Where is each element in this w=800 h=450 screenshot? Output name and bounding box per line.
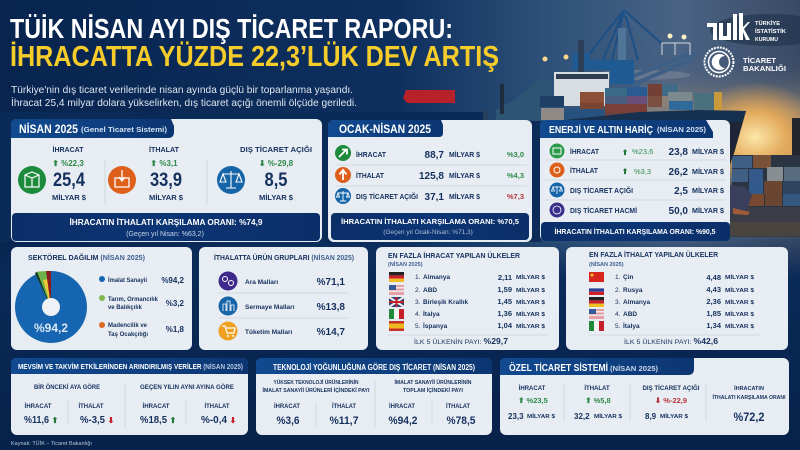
logo: Ticaret Bakanlığı: BAKANLIĞI (743, 64, 786, 73)
coverage ratio bar (541, 222, 730, 241)
row: ihracat: İHRACAT (356, 151, 387, 159)
metric: ihracat: ⬆ %22,3 (52, 159, 84, 168)
group: geçen yılın aynı ayına göre: %18,5 (140, 415, 167, 426)
logo: TÜİK: İSTATİSTİK (755, 28, 786, 35)
panel: özel ticaret sistemi (500, 358, 789, 435)
panel: en fazla ithalat yapılan ülkeler: (NİSAN 2025) (589, 261, 624, 268)
legend: %3,2 (166, 299, 185, 308)
column: dış ticaret açığı: 8,9 (645, 412, 657, 421)
legend: Taş Ocakçılığı (108, 331, 148, 338)
logo: Ticaret Bakanlığı: TİCARET (743, 56, 776, 65)
row: ithalat: %3,3 (634, 167, 651, 176)
panel: en fazla ithalat yapılan ülkeler: 1,85 (706, 309, 721, 318)
row: ihracat: 23,8 (669, 147, 688, 158)
metric: dış ticaret açığı: 8,5 (264, 170, 288, 191)
group: bir önceki aya göre: İHRACAT (24, 402, 52, 410)
row: dış ticaret hacmi: 50,0 (669, 206, 688, 217)
legend: ve Balıkçılık (108, 304, 142, 311)
group: yüksek teknoloji: İTHALAT (332, 402, 356, 410)
panel: en fazla ihracat yapılan ülkeler (376, 247, 559, 350)
panel header: özel: ÖZEL TİCARET SİSTEMİ (509, 361, 608, 374)
group: bir önceki aya göre: %11,6 (24, 415, 49, 426)
metric: ithalat (149, 146, 183, 202)
legend: Madencilik ve (108, 322, 147, 329)
group: geçen yılın aynı ayına göre: ⬆ (170, 416, 176, 425)
footer share: İLK 5 ÜLKENİN PAYI: %29,7 (414, 337, 509, 346)
group: bir önceki aya göre: ⬆ (52, 416, 58, 425)
row: dış ticaret hacmi: DIŞ TİCARET HACMİ (570, 207, 637, 215)
row: ithalat: 125,8 (419, 171, 444, 182)
panel: en fazla ihracat yapılan ülkeler: MİLYAR $ (516, 287, 546, 294)
column: ihracat: İHRACAT (519, 385, 546, 392)
group: bir önceki aya göre: ⬇ (108, 416, 114, 425)
legend: İmalat Sanayii (108, 276, 147, 284)
row: ara malları (218, 272, 345, 290)
panel: ithalatta ürün grupları: İTHALATTA ÜRÜN GRUPLARI (NİSAN 2025) (214, 253, 354, 262)
panel: Ocak-Nisan 2025 (328, 120, 532, 242)
row: ithalat: İTHALAT (570, 167, 599, 175)
row: ithalat: İTHALAT (356, 172, 385, 180)
intro text: Türkiye'nin dış ticaret verilerinde nisan ayında güçlü bir toparlanma yaşandı. (11, 84, 353, 96)
legend: %1,8 (166, 325, 185, 334)
panel header: teknoloji (256, 358, 492, 374)
panel: ithalatta ürün grupları (199, 247, 368, 350)
title: TÜİK NİSAN AYI DIŞ TİCARET RAPORU: (10, 13, 453, 44)
panel: en fazla ihracat yapılan ülkeler: 1,04 (497, 321, 513, 330)
column: karşılama oranı: İTHALATI KARŞILAMA ORANI (712, 394, 786, 401)
panel: en fazla ithalat yapılan ülkeler: İtalya (623, 322, 640, 330)
panel header: Enerji: ENERJİ VE ALTIN HARİÇ (549, 123, 653, 136)
panel: en fazla ithalat yapılan ülkeler: 4,48 (706, 273, 721, 282)
row: ihracat: MİLYAR $ (449, 151, 480, 159)
row: ithalat: MİLYAR $ (692, 168, 724, 176)
group: geçen yılın aynı ayına göre (140, 382, 236, 426)
row: dış ticaret açığı: %7,3 (507, 192, 524, 201)
row: ihracat: MİLYAR $ (692, 148, 724, 156)
group: imalat sanayii (388, 379, 476, 427)
panel: sektörel dağılım (11, 247, 192, 350)
panel: en fazla ithalat yapılan ülkeler: 3. (615, 299, 621, 306)
panel: en fazla ithalat yapılan ülkeler: 4. (615, 311, 621, 318)
icon: export box (18, 166, 46, 194)
intro text: İhracat 25,4 milyar dolara yükselirken, dış ticaret açığı önemli ölçüde geriledi. (11, 96, 357, 109)
legend: Tarım, Ormancılık (108, 296, 158, 303)
column: ithalat: MİLYAR $ (594, 413, 622, 420)
panel header: Enerji: (NİSAN 2025) (657, 126, 706, 134)
column: ihracat: 23,3 (508, 412, 524, 421)
row: dış ticaret hacmi: MİLYAR $ (692, 207, 724, 215)
panel: en fazla ithalat yapılan ülkeler: Almanya (623, 299, 650, 306)
panel: mevsim ve takvim (11, 358, 248, 435)
logo: TÜİK (707, 13, 786, 43)
panel: en fazla ithalat yapılan ülkeler: 4,43 (706, 285, 721, 294)
panel header: mevsim (11, 358, 248, 374)
column: karşılama oranı: %72,2 (734, 410, 765, 424)
panel header: Nisan 2025: NİSAN 2025 (19, 121, 78, 136)
logo: TÜİK: KURUMU (755, 37, 778, 43)
flag: Russia (589, 285, 604, 295)
panel: en fazla ithalat yapılan ülkeler: 1. (615, 274, 621, 281)
panel header: mevsim: MEVSİM VE TAKVİM ETKİLERİNDEN ARINDIRILMIŞ VERİLER (NİSAN 2025) (18, 363, 243, 371)
group: yüksek teknoloji: İMALAT SANAYİİ ÜRÜNLERİ İÇİNDEKİ PAYI (262, 387, 370, 394)
metric: ithalat: MİLYAR $ (149, 194, 183, 202)
row: ihracat: %3,0 (507, 150, 524, 159)
panel: en fazla ithalat yapılan ülkeler: 2. (615, 287, 621, 294)
icon: scales (217, 166, 245, 194)
column: dış ticaret açığı: MİLYAR $ (660, 413, 688, 420)
panel header: Enerji (540, 120, 713, 138)
panel header: özel: (NİSAN 2025) (610, 365, 658, 373)
pie chart (15, 271, 87, 343)
column: ihracat: ⬆ %23,5 (518, 396, 548, 405)
row: dış ticaret açığı: 2,5 (674, 186, 688, 197)
column: ihracat: MİLYAR $ (527, 413, 555, 420)
panel: en fazla ithalat yapılan ülkeler: Rusya (623, 287, 643, 294)
row: sermaye malları (218, 296, 345, 316)
panel: en fazla ithalat yapılan ülkeler: MİLYAR $ (725, 323, 755, 330)
flag: Italy (389, 309, 404, 319)
flag: Italy (589, 321, 604, 331)
flag: Germany (389, 272, 404, 282)
panel: en fazla ithalat yapılan ülkeler: EN FAZLA İTHALAT YAPILAN ÜLKELER (589, 250, 719, 259)
source note: Kaynak: TÜİK – Ticaret Bakanlığı (11, 440, 92, 447)
ship bow (700, 110, 746, 165)
row: ithalat (335, 167, 524, 183)
panel: en fazla ithalat yapılan ülkeler: 5. (615, 323, 621, 330)
column: karşılama oranı (712, 385, 786, 424)
panel: en fazla ithalat yapılan ülkeler: MİLYAR $ (725, 287, 755, 294)
metric: ihracat (52, 146, 86, 202)
title (10, 13, 499, 73)
panel: en fazla ithalat yapılan ülkeler: Çin (623, 274, 634, 281)
column: dış ticaret açığı: DIŞ TİCARET AÇIĞI (642, 384, 700, 392)
row: dış ticaret açığı: DIŞ TİCARET AÇIĞI (356, 192, 418, 201)
ship superstructure (554, 72, 609, 106)
coverage ratio bar: (Geçen yıl Ocak-Nisan: %71,3) (383, 229, 473, 236)
panel: en fazla ihracat yapılan ülkeler: MİLYAR $ (516, 311, 546, 318)
panel: en fazla ihracat yapılan ülkeler: MİLYAR $ (516, 323, 546, 330)
metric: dış ticaret açığı (240, 145, 312, 202)
panel: en fazla ihracat yapılan ülkeler: 1,59 (497, 285, 512, 294)
group: imalat sanayii: İMALAT SANAYİİ ÜRÜNLERİNİN (394, 379, 472, 386)
column: ithalat (574, 385, 622, 421)
row: ihracat (335, 145, 524, 161)
group: geçen yılın aynı ayına göre: İTHALAT (204, 402, 230, 410)
intro text (11, 84, 357, 109)
panel: en fazla ihracat yapılan ülkeler: 2,11 (498, 273, 512, 282)
coverage ratio bar (331, 213, 529, 240)
flag: USA (389, 285, 404, 295)
group: imalat sanayii: TOPLAM İÇİNDEKİ PAYI (403, 387, 463, 394)
panel: en fazla ithalat yapılan ülkeler: MİLYAR $ (725, 274, 755, 281)
flag: Germany (589, 297, 604, 307)
metric: ihracat: MİLYAR $ (52, 194, 86, 202)
column: ithalat: İTHALAT (584, 385, 610, 392)
panel: en fazla ihracat yapılan ülkeler: 2. (415, 287, 421, 294)
row: dış ticaret açığı: MİLYAR $ (449, 193, 480, 201)
metric: ithalat: İTHALAT (149, 146, 180, 154)
panel: en fazla ihracat yapılan ülkeler: 3. (415, 299, 421, 306)
panel: en fazla ihracat yapılan ülkeler: 4. (415, 311, 421, 318)
group: geçen yılın aynı ayına göre: GEÇEN YILIN AYNI AYINA GÖRE (140, 382, 235, 391)
panel: en fazla ithalat yapılan ülkeler: MİLYAR $ (725, 311, 755, 318)
icon: import box (108, 166, 136, 194)
logo: Ticaret Bakanlığı (704, 48, 786, 76)
group: imalat sanayii: İTHALAT (446, 402, 470, 410)
coverage ratio bar: İHRACATIN İTHALATI KARŞILAMA ORANI: %70,5 (341, 217, 519, 226)
row: ihracat: 88,7 (425, 150, 444, 161)
group: bir önceki aya göre: %-3,5 (80, 415, 105, 426)
panel: en fazla ihracat yapılan ülkeler: 1. (415, 274, 421, 281)
row: dış ticaret açığı: 37,1 (425, 192, 444, 203)
panel header: Nisan 2025: (Genel Ticaret Sistemi) (81, 125, 168, 134)
panel: en fazla ihracat yapılan ülkeler: Almanya (423, 274, 450, 281)
metric: dış ticaret açığı: MİLYAR $ (259, 194, 293, 202)
column: dış ticaret açığı (642, 384, 700, 421)
panel: Enerji ve altın hariç (540, 120, 730, 241)
coverage ratio bar: İHRACATIN İTHALATI KARŞILAMA ORANI: %90,5 (554, 227, 716, 236)
panel: en fazla ithalat yapılan ülkeler (566, 247, 788, 350)
panel: en fazla ithalat yapılan ülkeler: MİLYAR $ (725, 299, 755, 306)
container stacks (496, 79, 552, 120)
group: geçen yılın aynı ayına göre: %-0,4 (201, 415, 227, 426)
panel: en fazla ithalat yapılan ülkeler: 1,34 (706, 321, 722, 330)
panel: en fazla ihracat yapılan ülkeler: İtalya (423, 310, 440, 318)
group: yüksek teknoloji: İHRACAT (274, 402, 300, 410)
flag: China (589, 272, 604, 282)
row: dış ticaret hacmi (550, 202, 724, 218)
group: imalat sanayii: İHRACAT (389, 402, 415, 410)
metric: ithalat: ⬆ %3,1 (150, 159, 178, 168)
row: tüketim malları: Tüketim Malları (245, 329, 293, 336)
panel header: teknoloji: TEKNOLOJİ YOĞUNLUĞUNA GÖRE DIŞ TİCARET (NİSAN 2025) (273, 363, 475, 372)
metric: dış ticaret açığı: ⬇ %-29,8 (259, 159, 294, 168)
panel: en fazla ihracat yapılan ülkeler: İspanya (423, 322, 448, 330)
flag: USA (589, 309, 604, 319)
column: dış ticaret açığı: ⬇ %-22,9 (655, 396, 687, 405)
group: geçen yılın aynı ayına göre: ⬇ (230, 416, 236, 425)
row: dış ticaret açığı (335, 188, 524, 204)
row: ihracat: %23,6 (632, 147, 653, 156)
column: ihracat (508, 385, 555, 421)
column: ithalat: ⬆ %5,8 (585, 396, 611, 405)
panel: en fazla ihracat yapılan ülkeler: 1,45 (497, 297, 512, 306)
row: dış ticaret açığı: DIŞ TİCARET AÇIĞI (570, 186, 633, 195)
panel: en fazla ihracat yapılan ülkeler: EN FAZLA İHRACAT YAPILAN ÜLKELER (388, 251, 521, 260)
metric: ithalat: 33,9 (150, 170, 182, 191)
panel header: özel (500, 358, 694, 375)
panel: sektörel dağılım: SEKTÖREL DAĞILIM (NİSAN 2025) (28, 253, 145, 262)
row: dış ticaret açığı: MİLYAR $ (692, 187, 724, 195)
group: yüksek teknoloji: YÜKSEK TEKNOLOJİ ÜRÜNLERİNİN (274, 379, 358, 386)
row: ihracat (550, 144, 724, 158)
group: yüksek teknoloji: %11,7 (330, 415, 358, 427)
column: ithalat: 32,2 (574, 412, 590, 421)
legend (99, 276, 185, 338)
flag: UK (389, 297, 404, 307)
crane (590, 10, 693, 86)
group: imalat sanayii: %78,5 (446, 415, 476, 427)
row: ara malları: Ara Malları (245, 279, 278, 286)
group: yüksek teknoloji: %3,6 (276, 415, 300, 427)
panel: en fazla ihracat yapılan ülkeler: (NİSAN 2025) (388, 261, 423, 268)
distant tower (792, 118, 800, 158)
row: ithalat: ⬆ (622, 167, 628, 176)
flag: Spain (389, 321, 404, 331)
stacked containers (732, 155, 800, 207)
row: ihracat: ⬆ (622, 148, 628, 157)
row: ithalat: %4,3 (507, 171, 524, 180)
group: yüksek teknoloji (262, 379, 370, 427)
row: ara malları: %71,1 (317, 277, 345, 288)
metric: dış ticaret açığı: DIŞ TİCARET AÇIĞI (240, 145, 312, 154)
panel header: Ocak-Nisan: OCAK-NİSAN 2025 (339, 121, 431, 136)
coverage ratio bar (12, 213, 320, 241)
red stamp logo (403, 90, 455, 103)
group: bir önceki aya göre (24, 382, 114, 426)
panel: teknoloji yoğunluğu (256, 358, 492, 435)
row: dış ticaret açığı (550, 182, 724, 198)
coverage ratio bar: (Geçen yıl Nisan: %63,2) (126, 231, 204, 238)
row: ithalat (550, 162, 724, 178)
row: ihracat: İHRACAT (570, 148, 600, 156)
panel: en fazla ihracat yapılan ülkeler: MİLYAR $ (516, 299, 546, 306)
group: geçen yılın aynı ayına göre: İHRACAT (142, 402, 170, 410)
legend: %94,2 (161, 276, 185, 285)
group: bir önceki aya göre: BİR ÖNCEKİ AYA GÖRE (34, 382, 101, 391)
footer share: İLK 5 ÜLKENİN PAYI: %42,6 (624, 337, 719, 346)
panel: en fazla ithalat yapılan ülkeler: 2,36 (706, 297, 721, 306)
panel: en fazla ihracat yapılan ülkeler: 1,36 (497, 309, 512, 318)
row: ithalat: 26,2 (669, 167, 688, 178)
title: İHRACATTA YÜZDE 22,3’LÜK DEV ARTIŞ (10, 40, 499, 73)
panel: en fazla ihracat yapılan ülkeler: 5. (415, 323, 421, 330)
row: sermaye malları: %13,8 (317, 302, 345, 313)
logo: TÜİK: TÜRKİYE (755, 20, 780, 27)
metric: ihracat: 25,4 (53, 170, 85, 191)
coverage ratio bar: İHRACATIN İTHALATI KARŞILAMA ORANI: %74,9 (70, 218, 263, 227)
group: bir önceki aya göre: İTHALAT (78, 402, 104, 410)
panel: Nisan 2025 (11, 119, 322, 242)
row: ithalat: MİLYAR $ (449, 172, 480, 180)
panel: en fazla ihracat yapılan ülkeler: MİLYAR $ (516, 274, 546, 281)
pie chart: %94,2 (34, 321, 68, 335)
row: tüketim malları (218, 322, 345, 340)
column: karşılama oranı: İHRACATIN (734, 385, 764, 392)
group: imalat sanayii: %94,2 (388, 415, 418, 427)
row: sermaye malları: Sermaye Malları (245, 304, 295, 311)
metric: ihracat: İHRACAT (52, 146, 84, 154)
panel: en fazla ihracat yapılan ülkeler: ABD (423, 287, 437, 294)
panel: en fazla ihracat yapılan ülkeler: Birleşik Krallık (423, 299, 469, 306)
row: tüketim malları: %14,7 (317, 327, 345, 338)
panel: en fazla ithalat yapılan ülkeler: ABD (623, 311, 637, 318)
panel header: Nisan 2025 (11, 119, 174, 138)
